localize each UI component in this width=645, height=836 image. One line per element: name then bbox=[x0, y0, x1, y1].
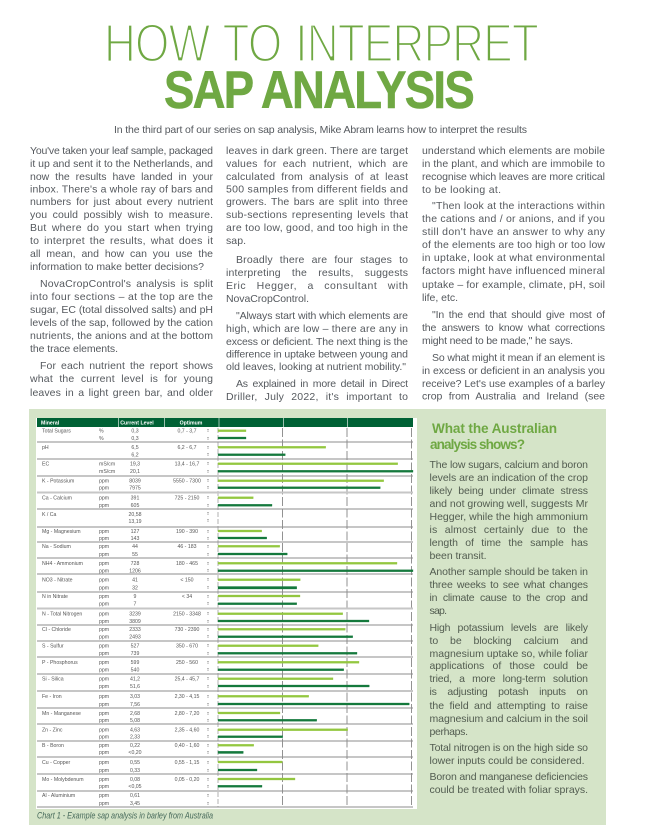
article column 1: sugar, EC (total dissolved salts) and pH bbox=[30, 304, 213, 316]
row: manganese: 2,80 - 7,20 bbox=[175, 711, 200, 717]
article column 2: old leaves, looking at nutrient mobility." bbox=[226, 361, 406, 373]
row: molybdenum: 0,05 - 0,20 bbox=[175, 777, 200, 783]
row: boron: 0,22 bbox=[130, 743, 140, 749]
sidebar text: applications of those could be bbox=[430, 660, 588, 672]
row: copper: 0,33 bbox=[130, 768, 140, 774]
article column 1: the trace elements. bbox=[30, 343, 118, 355]
sidebar text bbox=[430, 459, 589, 796]
row: nitrogen in nitrate: 9 bbox=[134, 594, 137, 600]
row: boron: B - Boron bbox=[42, 743, 64, 749]
article column 1: inbox. There's a whole ray of bars and bbox=[30, 184, 213, 196]
row: total nitrogen: 3809 bbox=[129, 619, 141, 625]
row: silica: Si - Silica bbox=[42, 676, 64, 682]
sidebar text: sap. bbox=[430, 605, 447, 617]
row: nitrogen in nitrate: N in Nitrate bbox=[42, 594, 68, 600]
row: ammonium: 180 - 465 bbox=[176, 561, 198, 567]
article column 2: sap. bbox=[226, 235, 246, 247]
row: pH: 6,2 - 6,7 bbox=[177, 445, 197, 451]
chart header bar: Mineral bbox=[41, 420, 60, 426]
article column 3: the answers to know what corrections bbox=[422, 322, 605, 334]
article column 1: levels of the sap, followed by the cation bbox=[30, 317, 213, 329]
row: manganese bbox=[42, 711, 317, 724]
sidebar text: lower inputs could be considered. bbox=[430, 755, 584, 767]
row: nitrate bbox=[42, 578, 300, 592]
row: potassium: 7975 bbox=[129, 486, 141, 492]
sidebar text: three weeks to see what changes bbox=[430, 579, 588, 591]
row: total nitrogen: ppm bbox=[99, 612, 109, 618]
row: copper: Cu - Copper bbox=[42, 760, 71, 766]
row: silica bbox=[42, 676, 369, 690]
article column 3: the cations and / or anions, and if you bbox=[422, 213, 605, 225]
sidebar text: in climate cause to the crop and bbox=[430, 592, 588, 604]
row: manganese: Mn - Manganese bbox=[42, 711, 81, 717]
article column 3: receive? Let's use examples of a barley bbox=[422, 378, 606, 390]
sidebar heading: analysis shows? bbox=[430, 437, 525, 452]
article column 3: recognise which leaves are more critical bbox=[422, 171, 605, 183]
article column 2: "Always start with which elements are bbox=[236, 310, 408, 322]
row: silica: ppm bbox=[99, 684, 109, 690]
row: total nitrogen bbox=[42, 612, 369, 625]
chart: example sap analysis bbox=[36, 418, 417, 809]
row: nitrogen in nitrate: ppm bbox=[99, 594, 109, 600]
sidebar text: Hegger, while the high ammonium bbox=[430, 511, 588, 523]
row: molybdenum: <0,05 bbox=[128, 784, 142, 790]
row: calcium: 605 bbox=[131, 503, 139, 509]
sidebar text: High potassium levels are likely bbox=[430, 622, 589, 634]
row: total nitrogen: 3239 bbox=[129, 612, 141, 618]
row: magnesium: 127 bbox=[131, 529, 139, 535]
article column 1: numbers for just about every nutrient bbox=[30, 196, 213, 208]
article column 1: nutrients, the anions and at the bottom bbox=[30, 330, 213, 342]
row: ammonium: 728 bbox=[131, 561, 139, 567]
row: copper: 0,55 - 1,15 bbox=[175, 760, 200, 766]
row: pH: 6,2 bbox=[131, 452, 139, 458]
article column 3: So what might it mean if an element is bbox=[432, 352, 605, 364]
row: calcium: Ca - Calcium bbox=[42, 496, 72, 502]
row: sulfur: 527 bbox=[131, 644, 139, 650]
subtitle: In the third part of our series on sap analysis, Mike Abram learns how to interpret the results bbox=[114, 124, 527, 136]
article column 3: might need to be made," he says. bbox=[422, 335, 573, 347]
article column 2: sub-sections representing levels that bbox=[226, 209, 408, 221]
row: nitrate: 41 bbox=[132, 578, 138, 584]
row: total sugars: 0,3 bbox=[131, 436, 139, 442]
article column 1: into four sections – at the top are the bbox=[30, 291, 213, 303]
article column 3: crop from Australia and Ireland (see bbox=[422, 390, 605, 402]
row: copper: ppm bbox=[99, 760, 109, 766]
row: boron: ppm bbox=[99, 743, 109, 749]
row: zinc: ppm bbox=[99, 734, 109, 740]
row: sodium: 55 bbox=[132, 552, 138, 558]
article column 2: Broadly there are four stages to bbox=[236, 254, 408, 266]
row: sulfur: S - Sulfur bbox=[42, 644, 64, 650]
sidebar heading bbox=[430, 421, 557, 452]
article column 3: uptake – for example, climate, pH, soil bbox=[422, 279, 605, 291]
row: manganese: ppm bbox=[99, 711, 109, 717]
chart header bar bbox=[37, 418, 413, 427]
row: potassium: K - Potassium bbox=[42, 478, 74, 484]
row: phosphorus: 599 bbox=[131, 660, 139, 666]
row: manganese: 5,08 bbox=[130, 718, 140, 724]
chart header bar: Current Level bbox=[120, 420, 154, 426]
row: K / Ca: 13,19 bbox=[129, 519, 142, 525]
row: EC: 13,4 - 16,7 bbox=[175, 462, 200, 468]
row: sodium: ppm bbox=[99, 544, 109, 550]
sidebar text: could be treated with foliar sprays. bbox=[430, 784, 588, 796]
row: sulfur: 350 - 670 bbox=[176, 644, 198, 650]
row: pH: 6,5 bbox=[131, 445, 139, 451]
article column 2: 500 samples from different fields and bbox=[226, 184, 408, 196]
row: sulfur: ppm bbox=[99, 644, 109, 650]
row: total sugars: Total Sugars bbox=[42, 428, 71, 434]
row: pH: pH bbox=[42, 445, 49, 451]
row: nitrogen in nitrate: < 34 bbox=[182, 594, 192, 600]
article column 3: life, etc. bbox=[422, 292, 458, 304]
article column 1: it up and sent it to the Netherlands, and bbox=[30, 158, 213, 170]
sidebar text: length of time the sample has bbox=[430, 537, 588, 549]
row: zinc: ppm bbox=[99, 728, 109, 734]
row: silica: 25,4 - 45,7 bbox=[175, 676, 200, 682]
row: sodium: ppm bbox=[99, 552, 109, 558]
sidebar text: and not growing well, suggests Mr bbox=[430, 498, 588, 510]
row: zinc: 2,33 bbox=[130, 734, 140, 740]
row: molybdenum bbox=[42, 777, 295, 790]
article column 3: "Then look at the interactions within bbox=[432, 200, 605, 212]
sidebar text: the field and attempting to raise bbox=[430, 700, 588, 712]
sidebar text: levels are an indication of the crop bbox=[430, 472, 588, 484]
article column 2: high, which are low – there are any in bbox=[226, 323, 408, 335]
article column 3: of the elements are too high or too low bbox=[422, 239, 605, 251]
row: K / Ca: 20,58 bbox=[129, 512, 142, 518]
row: sodium bbox=[42, 544, 287, 558]
row: sodium: Na - Sodium bbox=[42, 544, 71, 550]
row: magnesium bbox=[42, 529, 267, 542]
article column 3: factors might have influenced mineral bbox=[422, 265, 605, 277]
row: ammonium: NH4 - Ammonium bbox=[42, 561, 83, 567]
row: ammonium: ppm bbox=[99, 561, 109, 567]
row: chloride: 2493 bbox=[129, 634, 141, 640]
article column 1: all mean, and how can you use the bbox=[30, 248, 213, 260]
article column 2 bbox=[226, 145, 408, 403]
row: nitrate: NO3 - Nitrate bbox=[42, 578, 73, 584]
article column 2: values for each nutrient, which are bbox=[226, 158, 408, 170]
sidebar text: Total nitrogen is on the high side so bbox=[430, 742, 588, 754]
title: how to interpret: HOW TO INTERPRET bbox=[104, 14, 538, 74]
sidebar text: magnesium uptake so, while foliar bbox=[430, 648, 588, 660]
row: nitrate: ppm bbox=[99, 586, 109, 592]
article column 2: Driller, July 2022, it's important to bbox=[226, 391, 408, 403]
row: chloride: ppm bbox=[99, 634, 109, 640]
chart caption: Chart 1 - Example sap analysis in barley from Australia bbox=[37, 810, 213, 822]
row: magnesium: 190 - 390 bbox=[176, 529, 198, 535]
article column 3: "In the end that should give most of bbox=[432, 309, 605, 321]
row: total nitrogen: 2150 - 3348 bbox=[173, 612, 201, 618]
article column 2: NovaCropControl. bbox=[226, 293, 309, 305]
row: chloride: 2333 bbox=[129, 627, 141, 633]
row: zinc bbox=[42, 728, 348, 740]
row: EC: 19,3 bbox=[130, 462, 140, 468]
row: manganese: 2,68 bbox=[130, 711, 140, 717]
row: aluminium bbox=[42, 793, 140, 807]
row: calcium bbox=[42, 496, 272, 509]
article column 3: in the plant, and which are immobile to bbox=[422, 158, 605, 170]
row: phosphorus: 250 - 560 bbox=[176, 660, 198, 666]
row: phosphorus bbox=[42, 660, 359, 674]
row: silica: ppm bbox=[99, 676, 109, 682]
row: chloride: ppm bbox=[99, 627, 109, 633]
row: molybdenum: ppm bbox=[99, 777, 109, 783]
sidebar text: tried, a more long-term solution bbox=[430, 673, 588, 685]
article column 1: now the results have landed in your bbox=[30, 171, 214, 183]
row: calcium: 725 - 2150 bbox=[175, 496, 200, 502]
row: molybdenum: 0,08 bbox=[130, 777, 140, 783]
row: total nitrogen: ppm bbox=[99, 619, 109, 625]
article column 1 bbox=[29, 145, 214, 399]
row: magnesium: Mg - Magnesium bbox=[42, 529, 81, 535]
row: aluminium: Al - Aluminium bbox=[42, 793, 75, 799]
row: pH bbox=[42, 445, 326, 458]
chart header bar: Optimum bbox=[180, 420, 203, 426]
row: silica: 51,6 bbox=[130, 684, 140, 690]
sidebar heading: What the Australian bbox=[432, 421, 557, 436]
row: total nitrogen: N - Total Nitrogen bbox=[42, 612, 82, 618]
article column 2: calculated from analysis of at least bbox=[226, 171, 408, 183]
row: iron: 3,03 bbox=[130, 694, 140, 700]
row: phosphorus: P - Phosphorus bbox=[42, 660, 78, 666]
row: magnesium: ppm bbox=[99, 536, 109, 542]
row: iron: Fe - Iron bbox=[42, 694, 62, 700]
sidebar text: been transit. bbox=[430, 550, 486, 562]
sidebar text: is adjusting potash inputs on bbox=[430, 686, 588, 698]
row: nitrate: < 150 bbox=[180, 578, 194, 584]
row: copper: ppm bbox=[99, 768, 109, 774]
article column 1: information to make better decisions? bbox=[30, 261, 204, 273]
row: zinc: 4,63 bbox=[130, 728, 140, 734]
row: potassium: ppm bbox=[99, 486, 109, 492]
article column 1: But where do you start when trying bbox=[30, 222, 213, 234]
row: K / Ca: K / Ca bbox=[42, 512, 57, 518]
article column 2: are too low, good, and too high in the bbox=[226, 222, 408, 234]
row: iron bbox=[42, 694, 409, 708]
article column 3: understand which elements are mobile bbox=[422, 145, 605, 157]
row: sulfur: 739 bbox=[131, 651, 139, 657]
row: sodium: 44 bbox=[132, 544, 138, 550]
row: iron: 7,56 bbox=[130, 702, 140, 708]
article column 1: For each nutrient the report shows bbox=[40, 360, 213, 372]
row: EC: mS/cm bbox=[99, 462, 115, 468]
row: boron bbox=[42, 743, 254, 756]
article column 2: growers. The bars are split into three bbox=[226, 196, 408, 208]
row: phosphorus: ppm bbox=[99, 668, 109, 674]
article column 2: As explained in more detail in Direct bbox=[236, 378, 408, 390]
row: molybdenum: ppm bbox=[99, 784, 109, 790]
article column 2: Eric Hegger, a consultant with bbox=[226, 280, 408, 292]
row: total sugars: 0,3 bbox=[131, 428, 139, 434]
article column 1: you could possibly wish to measure. bbox=[30, 209, 213, 221]
row: manganese: ppm bbox=[99, 718, 109, 724]
row: iron: 2,30 - 4,15 bbox=[175, 694, 200, 700]
row: nitrate: 32 bbox=[132, 586, 138, 592]
row: chloride bbox=[42, 627, 353, 640]
row: molybdenum: Mo - Molybdenum bbox=[42, 777, 84, 783]
row: ammonium: 1206 bbox=[129, 568, 141, 574]
sidebar text: magnesium and calcium in the soil bbox=[430, 713, 588, 725]
row: EC: mS/cm bbox=[99, 469, 115, 475]
row: potassium: 8039 bbox=[129, 478, 141, 484]
row: calcium: ppm bbox=[99, 496, 109, 502]
row: ammonium bbox=[42, 561, 413, 574]
row: potassium: 5550 - 7300 bbox=[173, 478, 201, 484]
row: total sugars: 0,7 - 3,7 bbox=[177, 428, 197, 434]
row: potassium bbox=[42, 478, 384, 492]
article column 2: difference in uptake between young and bbox=[226, 348, 408, 360]
row: nitrogen in nitrate bbox=[42, 594, 300, 608]
article column 1: NovaCropControl's analysis is split bbox=[40, 278, 213, 290]
sidebar text: to be blocking calcium and bbox=[430, 635, 588, 647]
article column 2: leaves in dark green. There are target bbox=[226, 145, 408, 157]
row: total sugars bbox=[42, 428, 246, 442]
sidebar text: is almost certainly due to the bbox=[430, 524, 588, 536]
article column 3 bbox=[422, 145, 606, 402]
row: nitrate: ppm bbox=[99, 578, 109, 584]
row: copper: 0,55 bbox=[130, 760, 140, 766]
row: phosphorus: 540 bbox=[131, 668, 139, 674]
article column 1: to interpret the results, what does it bbox=[30, 235, 213, 247]
row: potassium: ppm bbox=[99, 478, 109, 484]
title: sap analysis: SAP ANALYSIS bbox=[164, 61, 474, 120]
row: silica: 41,2 bbox=[130, 676, 140, 682]
row: calcium: 391 bbox=[131, 496, 139, 502]
article column 1: leaves in a light green bar, and older bbox=[30, 387, 214, 399]
row: phosphorus: ppm bbox=[99, 660, 109, 666]
row: aluminium: ppm bbox=[99, 793, 109, 799]
row: boron: <0,20 bbox=[128, 750, 142, 756]
article column 1: You've taken your leaf sample, packaged bbox=[30, 145, 213, 157]
row: iron: ppm bbox=[99, 702, 109, 708]
sidebar text: likely being under climate stress bbox=[430, 485, 588, 497]
row: zinc: 2,35 - 4,60 bbox=[175, 728, 200, 734]
row: EC: EC bbox=[42, 462, 49, 468]
row: magnesium: 143 bbox=[131, 536, 139, 542]
row: chloride: Cl - Chloride bbox=[42, 627, 71, 633]
article column 2: interpreting the results, suggests bbox=[226, 267, 408, 279]
article column 3: to be looking at. bbox=[422, 184, 501, 196]
sidebar text: Boron and manganese deficiencies bbox=[430, 771, 588, 783]
article column 2: excess or deficient. The next thing is the bbox=[226, 336, 408, 348]
row: boron: 0,40 - 1,60 bbox=[175, 743, 200, 749]
article column 3: in uptake, look at what environmental bbox=[422, 252, 605, 264]
row: nitrogen in nitrate: 7 bbox=[134, 602, 137, 608]
row: total sugars: % bbox=[99, 428, 104, 434]
row: magnesium: ppm bbox=[99, 529, 109, 535]
row: boron: ppm bbox=[99, 750, 109, 756]
article column 3: still don't have an answer to why any bbox=[422, 226, 606, 238]
row: calcium: ppm bbox=[99, 503, 109, 509]
row: copper bbox=[42, 760, 282, 774]
row: aluminium: 0,61 bbox=[130, 793, 140, 799]
row: EC: 20,1 bbox=[130, 469, 140, 475]
row: total sugars: % bbox=[99, 436, 104, 442]
row: EC bbox=[42, 462, 413, 475]
panel: chart and analysis background bbox=[29, 409, 606, 825]
row: chloride: 730 - 2390 bbox=[175, 627, 200, 633]
row: nitrogen in nitrate: ppm bbox=[99, 602, 109, 608]
sidebar text: perhaps. bbox=[430, 726, 468, 738]
article column 3: in excess or deficient in an analysis you bbox=[422, 365, 605, 377]
row: zinc: Zn - Zinc bbox=[42, 728, 63, 734]
row: sodium: 46 - 183 bbox=[177, 544, 197, 550]
sidebar text: The low sugars, calcium and boron bbox=[430, 459, 588, 471]
row: iron: ppm bbox=[99, 694, 109, 700]
row: sulfur bbox=[42, 644, 357, 657]
row: aluminium: 3,45 bbox=[130, 801, 140, 807]
article column 1: what the current level is for young bbox=[29, 373, 213, 385]
row: sulfur: ppm bbox=[99, 651, 109, 657]
row: ammonium: ppm bbox=[99, 568, 109, 574]
row: K / Ca bbox=[42, 512, 142, 525]
row: aluminium: ppm bbox=[99, 801, 109, 807]
sidebar text: Another sample should be taken in bbox=[430, 566, 588, 578]
